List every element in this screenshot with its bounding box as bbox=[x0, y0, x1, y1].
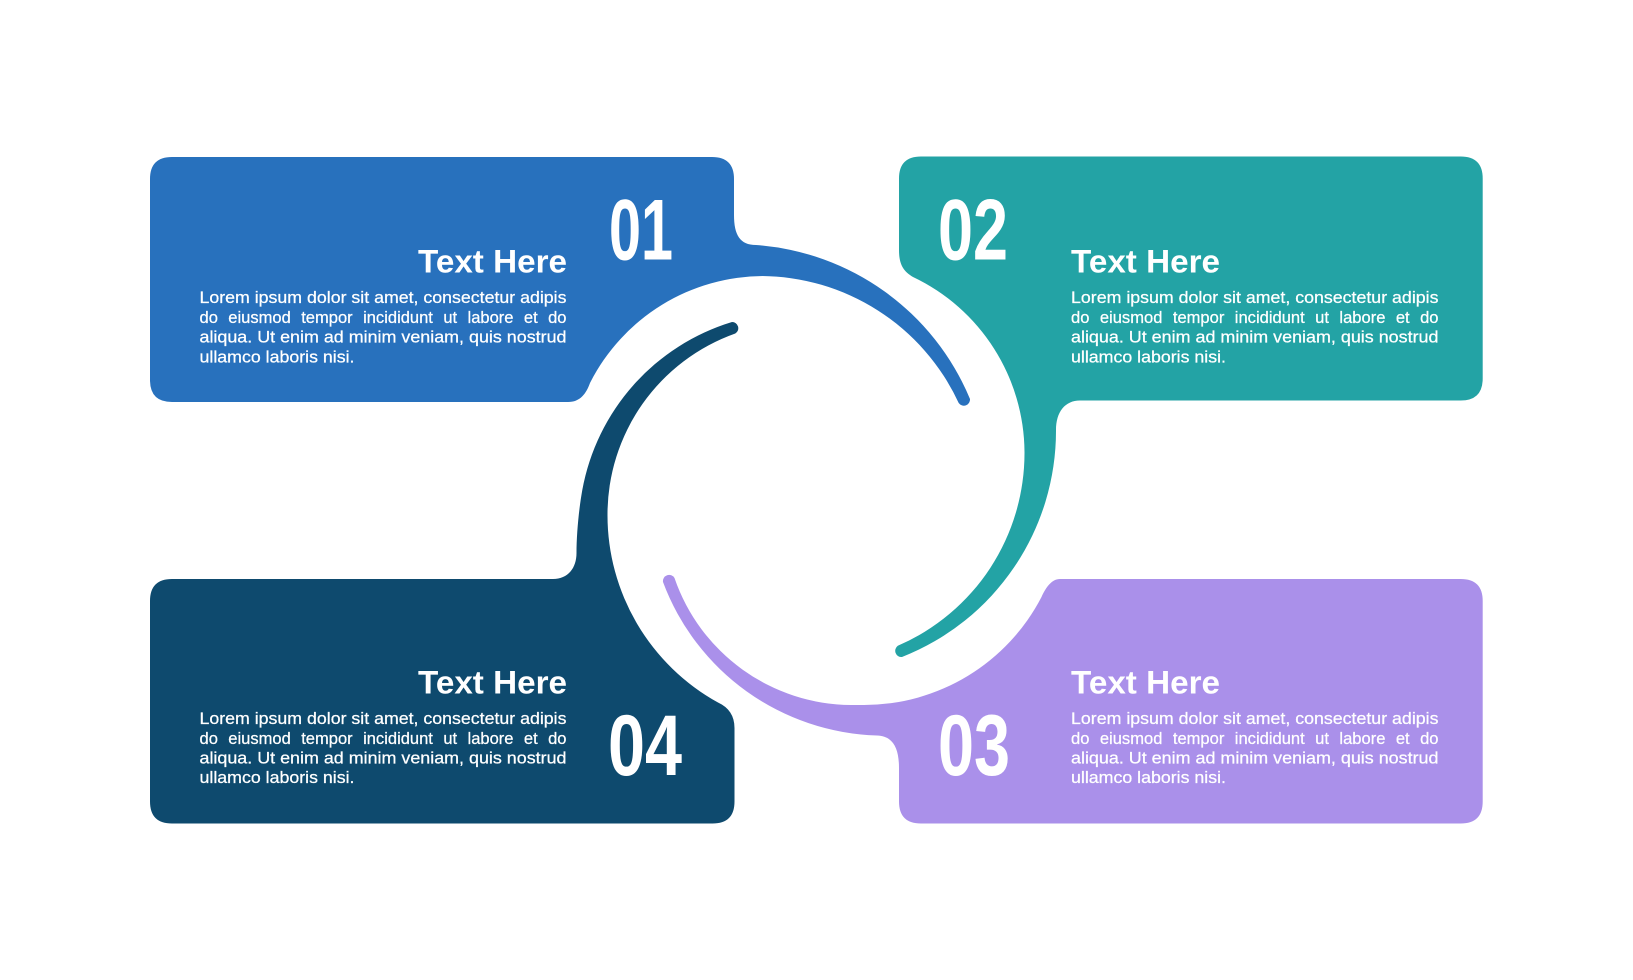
body text: Lorem ipsum dolor sit amet, consectetur adipis bbox=[200, 709, 566, 728]
number 01: 01 bbox=[609, 182, 673, 278]
body text: do eiusmod tempor incididunt ut labore et do bbox=[200, 729, 566, 748]
panel: step 04 bbox=[150, 322, 738, 824]
body text: do eiusmod tempor incididunt ut labore et do bbox=[1071, 308, 1438, 327]
body text bbox=[1071, 288, 1438, 366]
body text: ullamco laboris nisi. bbox=[1071, 768, 1226, 787]
body text: Lorem ipsum dolor sit amet, consectetur adipis bbox=[200, 288, 566, 307]
panel: step 03 bbox=[663, 575, 1483, 824]
panel: step 02 bbox=[895, 156, 1483, 657]
number 03: 03 bbox=[938, 698, 1010, 794]
heading: Text Here bbox=[1071, 244, 1220, 280]
number 04: 04 bbox=[608, 698, 682, 794]
body text: aliqua. Ut enim ad minim veniam, quis nostrud bbox=[1071, 328, 1438, 347]
body text: ullamco laboris nisi. bbox=[200, 347, 354, 366]
teal callout shape with arc bbox=[895, 156, 1483, 657]
blue callout shape with arc bbox=[150, 157, 970, 406]
body text: do eiusmod tempor incididunt ut labore et do bbox=[200, 308, 566, 327]
heading: Text Here bbox=[1071, 664, 1220, 700]
panel: step 01 bbox=[150, 157, 970, 406]
body text bbox=[200, 709, 566, 787]
body text: Lorem ipsum dolor sit amet, consectetur adipis bbox=[1071, 709, 1438, 728]
body text bbox=[200, 288, 566, 366]
body text: aliqua. Ut enim ad minim veniam, quis nostrud bbox=[200, 748, 566, 768]
body text: aliqua. Ut enim ad minim veniam, quis nostrud bbox=[200, 328, 566, 347]
body text: do eiusmod tempor incididunt ut labore et do bbox=[1071, 729, 1438, 748]
heading: Text Here bbox=[418, 664, 567, 700]
number 02: 02 bbox=[938, 182, 1008, 278]
body text: ullamco laboris nisi. bbox=[1071, 347, 1226, 366]
body text: ullamco laboris nisi. bbox=[200, 768, 354, 787]
body text: aliqua. Ut enim ad minim veniam, quis nostrud bbox=[1071, 748, 1438, 768]
body text: Lorem ipsum dolor sit amet, consectetur adipis bbox=[1071, 288, 1438, 307]
purple callout shape with arc bbox=[663, 575, 1483, 824]
navy callout shape with arc bbox=[150, 322, 738, 824]
body text bbox=[1071, 709, 1438, 787]
heading: Text Here bbox=[418, 244, 567, 280]
